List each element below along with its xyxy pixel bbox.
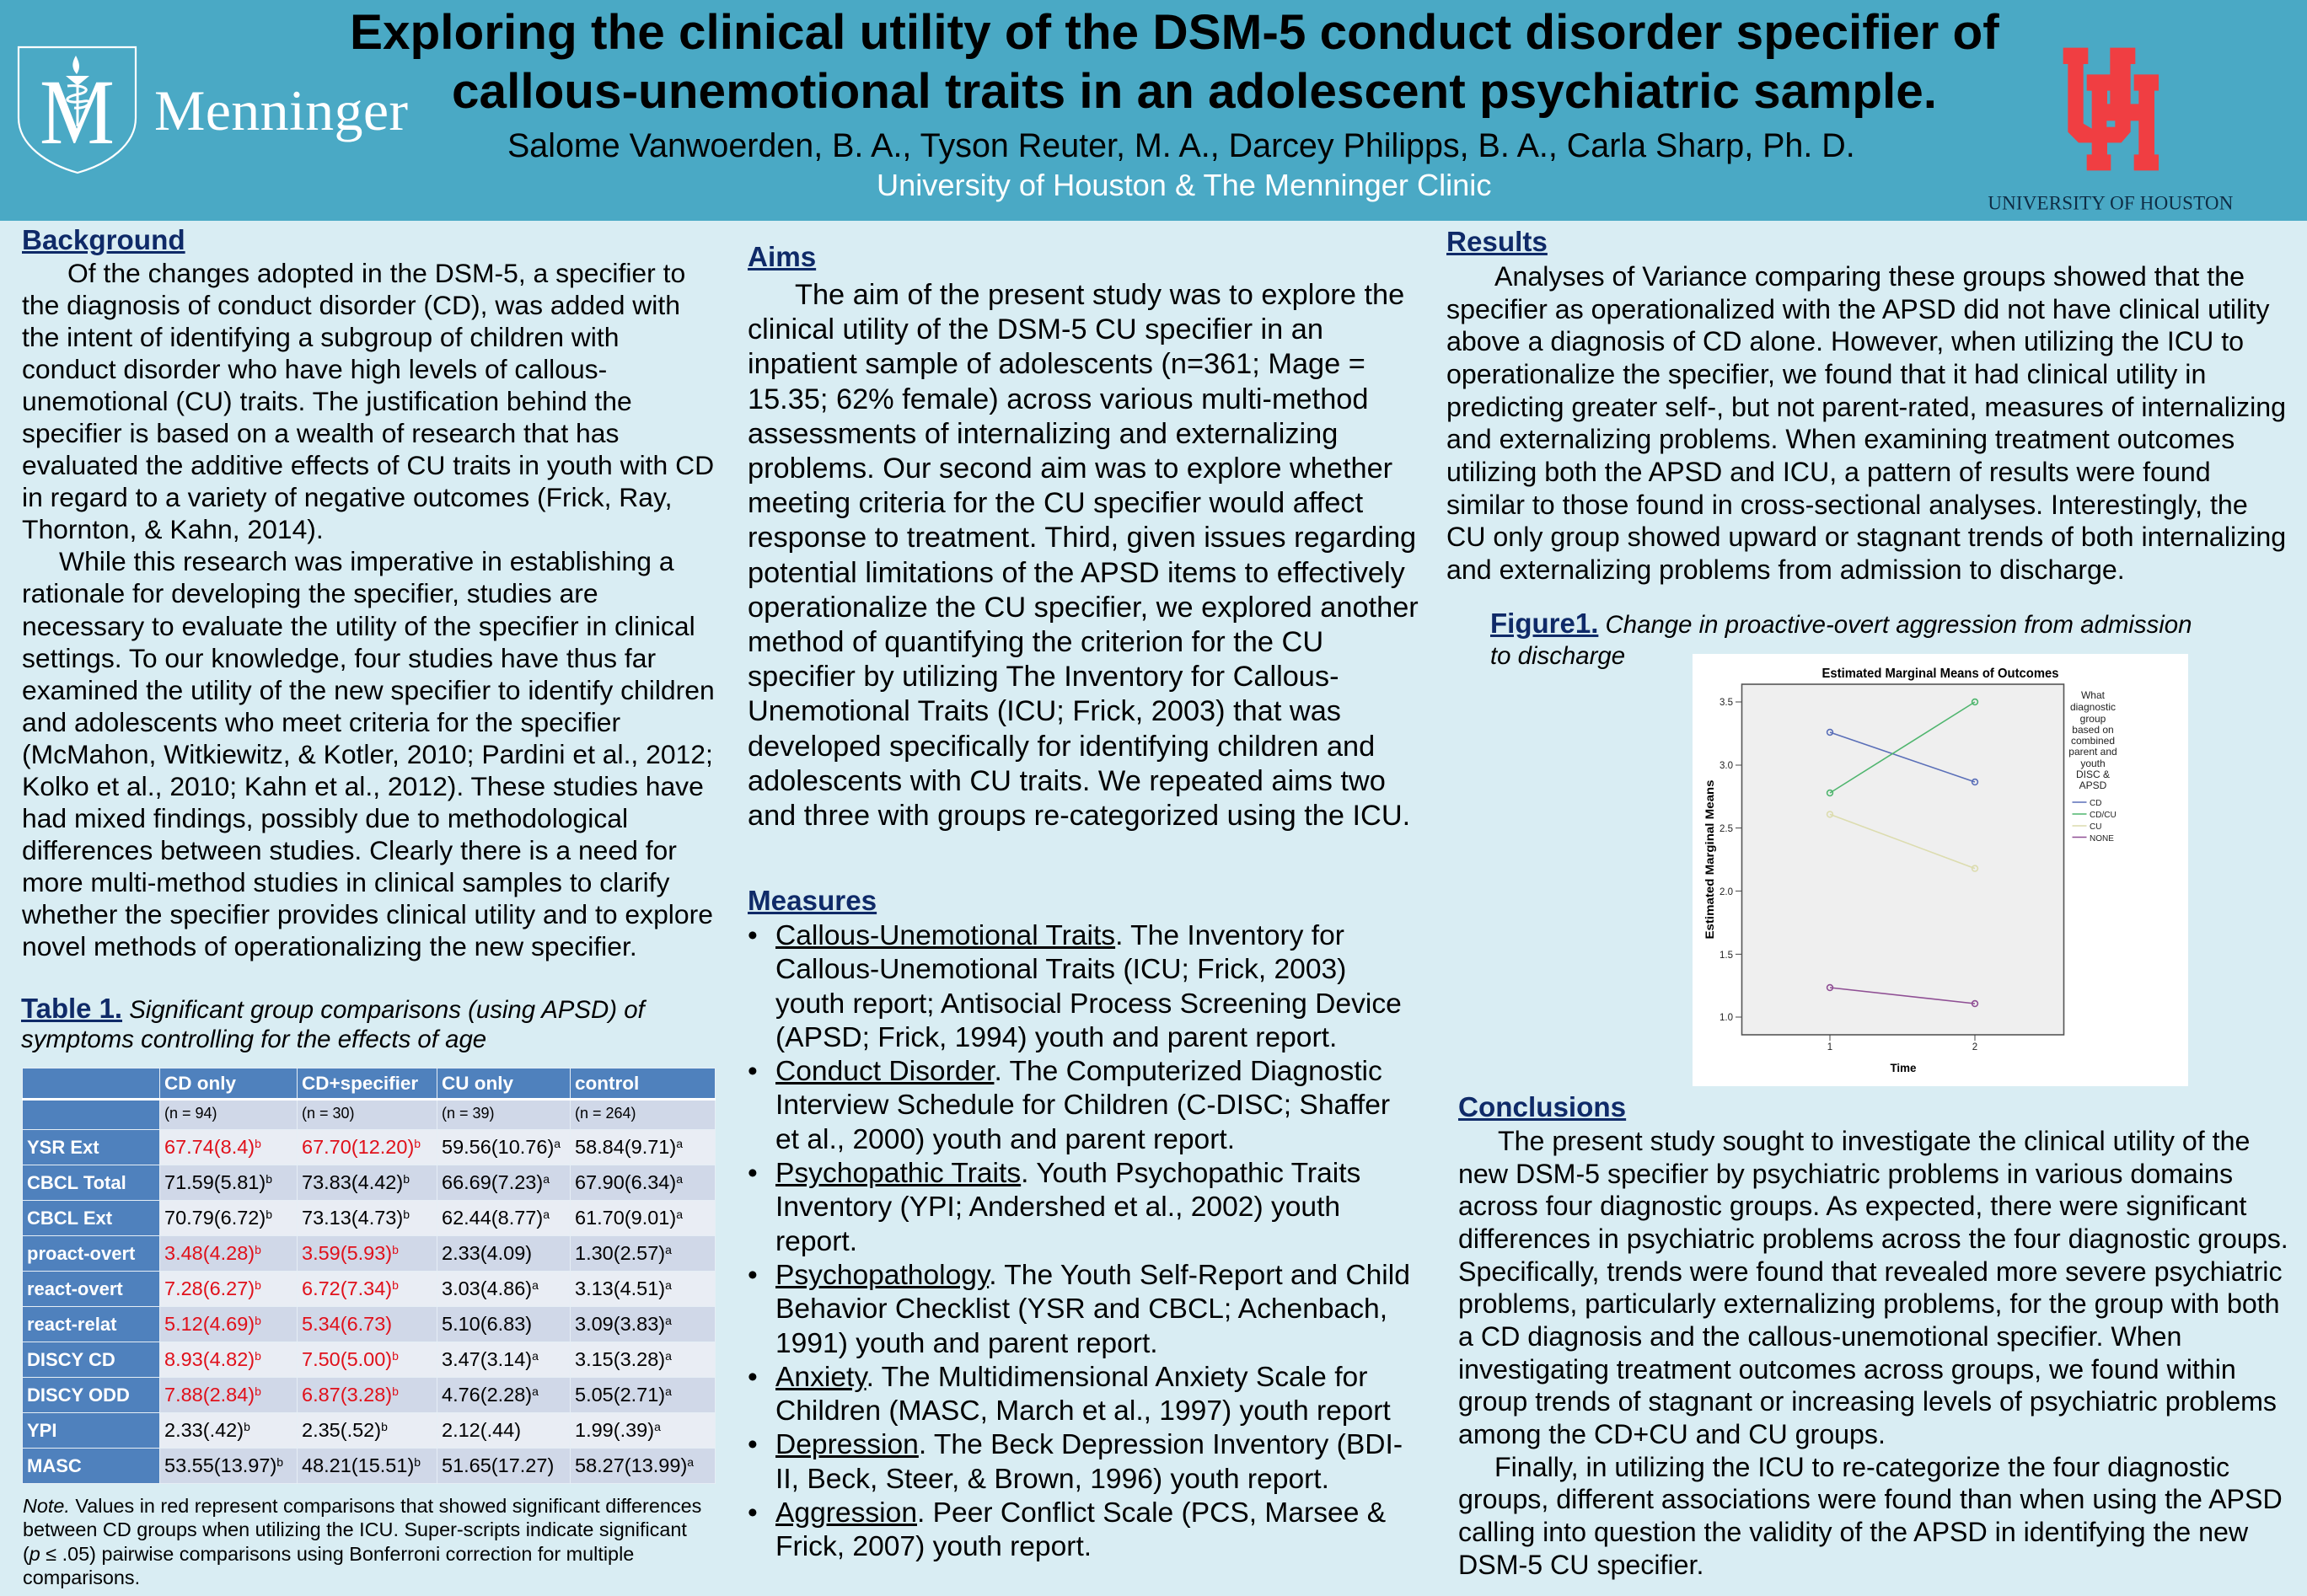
heading: conclusions: Conclusions xyxy=(1458,1092,1626,1122)
text: conclusions body: investigating treatment outcomes across groups, we found within xyxy=(1458,1354,2236,1384)
text: aims body: clinical utility of the DSM-5 CU specifier in an xyxy=(748,313,1323,345)
x axis labels: 2 xyxy=(1972,1042,1977,1052)
table: group comparisons: 67.90(6.34)a xyxy=(575,1171,683,1193)
text: results body: operationalize the specifier, we found that it had clinical utility in xyxy=(1446,359,2206,389)
list: measures: Children (MASC, March et al., 1997) youth report xyxy=(775,1395,1391,1427)
table: group comparisons: 5.34(6.73) xyxy=(302,1313,392,1335)
table: group comparisons: (n = 39) xyxy=(442,1105,495,1122)
table: group comparisons: 71.59(5.81)b xyxy=(164,1171,272,1193)
text: results body: utilizing both the APSD and ICU, a pattern of results were found xyxy=(1446,457,2211,487)
text: conclusions body: among the CD+CU and CU groups. xyxy=(1458,1419,1886,1449)
table: group comparisons: 3.59(5.93)b xyxy=(302,1242,399,1264)
list: measures: Depression. The Beck Depression Inventory (BDI- xyxy=(775,1429,1403,1460)
legend: NONE xyxy=(2090,834,2114,844)
table: group comparisons: control xyxy=(575,1073,639,1094)
table: group comparisons: 4.76(2.28)a xyxy=(442,1384,539,1406)
title: Exploring the clinical utility of the DSM-5 conduct disorder specifier of xyxy=(350,5,1999,60)
table: group comparisons: 5.05(2.71)a xyxy=(575,1384,672,1406)
legend: group xyxy=(2080,713,2106,725)
y axis ticks: 1.5 xyxy=(1720,951,1733,961)
text: background body: While this research was imperative in establishing a xyxy=(59,546,674,576)
text: background body: Thornton, & Kahn, 2014). xyxy=(22,514,324,544)
text: background body: unemotional (CU) traits. The justification behind the xyxy=(22,386,632,416)
table: group comparisons: MASC xyxy=(27,1454,82,1476)
table: group comparisons: 5.10(6.83) xyxy=(442,1313,532,1335)
table: group comparisons xyxy=(22,1068,716,1484)
table: group comparisons: 3.47(3.14)a xyxy=(442,1348,539,1370)
table: group comparisons: CU only xyxy=(442,1073,513,1094)
table: group comparisons: 3.03(4.86)a xyxy=(442,1277,539,1299)
table: group comparisons: 58.84(9.71)a xyxy=(575,1136,683,1158)
table: group comparisons: CD+specifier xyxy=(302,1073,418,1094)
text: conclusions body: problems, particularly externalizing problems, for the group with both xyxy=(1458,1288,2280,1319)
table: group comparisons: 51.65(17.27) xyxy=(442,1454,554,1476)
text: background body: the diagnosis of conduct disorder (CD), was added with xyxy=(22,290,680,320)
text: background body: (McMahon, Witkiewitz, & Kotler, 2010; Pardini et al., 2012; xyxy=(22,739,713,769)
table: group comparisons: (n = 30) xyxy=(302,1105,355,1122)
panel: measures: • xyxy=(748,1158,758,1189)
text: conclusions body: a CD diagnosis and the callous-unemotional specifier. When xyxy=(1458,1321,2181,1352)
text: conclusions body: new DSM-5 specifier by psychiatric problems in various domains xyxy=(1458,1159,2233,1189)
table: group comparisons: YSR Ext xyxy=(27,1136,99,1158)
list: measures: 1991) youth and parent report. xyxy=(775,1328,1158,1359)
text: conclusions body xyxy=(1458,1126,2288,1580)
logo: Menninger: M xyxy=(40,61,115,163)
title xyxy=(350,5,1999,119)
header banner xyxy=(0,0,2307,221)
x axis title: Time xyxy=(1890,1061,1917,1074)
list: measures: Anxiety. The Multidimensional Anxiety Scale for xyxy=(775,1362,1367,1393)
table: group comparisons: 3.09(3.83)a xyxy=(575,1313,672,1335)
list: measures: Callous-Unemotional Traits (ICU; Frick, 2003) xyxy=(775,954,1346,985)
text: background body: specifier is based on a wealth of research that has xyxy=(22,418,619,448)
text: aims body: 15.35; 62% female) across various multi-method xyxy=(748,383,1368,415)
table: group comparisons: 5.12(4.69)b xyxy=(164,1313,261,1335)
figure caption xyxy=(1490,608,2192,670)
list: measures: youth report; Antisocial Process Screening Device xyxy=(775,988,1402,1020)
x axis labels xyxy=(1827,1042,1977,1052)
panel: table 1 xyxy=(21,993,716,1588)
y axis ticks: 2.5 xyxy=(1720,824,1733,834)
text: conclusions body: Specifically, trends were found that revealed more severe psychiatric xyxy=(1458,1256,2283,1287)
text: aims body: assessments of internalizing and externalizing xyxy=(748,418,1338,450)
logo: Menninger xyxy=(17,46,408,174)
panel: aims xyxy=(748,241,1419,832)
text: aims body: inpatient sample of adolescents (n=361; Mage = xyxy=(748,348,1365,380)
text: results body: and externalizing problems from admission to discharge. xyxy=(1446,554,2125,585)
table note: between CD groups when utilizing the ICU. Super-scripts indicate significant xyxy=(23,1518,687,1540)
panel: measures: • xyxy=(748,1497,758,1529)
text: aims body: Unemotional Traits (ICU; Frick, 2003) that was xyxy=(748,695,1341,727)
legend: youth xyxy=(2080,758,2106,769)
legend: diagnostic xyxy=(2070,701,2116,713)
text: background body xyxy=(22,258,715,961)
text: background body: settings. To our knowledge, four studies have thus far xyxy=(22,643,656,673)
table: group comparisons: 67.70(12.20)b xyxy=(302,1136,421,1158)
text: background body: in regard to a variety of negative outcomes (Frick, Ray, xyxy=(22,482,672,512)
text: background body: more multi-method studies in clinical samples to clarify xyxy=(22,867,669,897)
y axis ticks: 3.5 xyxy=(1720,698,1733,708)
series: NONE xyxy=(1827,985,1977,1006)
text: aims body: specifier by utilizing The Inventory for Callous- xyxy=(748,661,1339,693)
text: aims body: The aim of the present study was to explore the xyxy=(795,279,1404,311)
figure caption: Figure1. Change in proactive-overt aggression from admission xyxy=(1490,608,2192,639)
text: background body: the intent of identifying a subgroup of children with xyxy=(22,322,619,352)
line chart: estimated marginal means xyxy=(1693,654,2188,1086)
panel: figure 1 xyxy=(1490,608,2192,1086)
text: conclusions body: The present study sought to investigate the clinical utility of the xyxy=(1498,1126,2250,1156)
text: results body: Analyses of Variance comparing these groups showed that the xyxy=(1494,261,2245,292)
text: aims body: operationalize the CU specifier, we explored another xyxy=(748,592,1419,624)
list: measures: Interview Schedule for Children (C-DISC; Shaffer xyxy=(775,1090,1390,1121)
panel: measures: • xyxy=(748,1260,758,1291)
legend: parent and xyxy=(2068,746,2117,758)
y axis ticks: 3.0 xyxy=(1720,761,1733,771)
legend: combined xyxy=(2071,735,2115,747)
y axis ticks xyxy=(1720,698,1975,1041)
table: group comparisons: 73.83(4.42)b xyxy=(302,1171,410,1193)
table: group comparisons: 7.88(2.84)b xyxy=(164,1384,261,1406)
table: group comparisons: react-overt xyxy=(27,1277,123,1299)
table: group comparisons: DISCY ODD xyxy=(27,1384,130,1406)
table: group comparisons: 1.99(.39)a xyxy=(575,1419,661,1441)
table: group comparisons: CD only xyxy=(164,1073,236,1094)
text: aims body: adolescents with CU traits. We repeated aims two xyxy=(748,765,1386,797)
table: group comparisons: 6.87(3.28)b xyxy=(302,1384,399,1406)
list: measures: Aggression. Peer Conflict Scale (PCS, Marsee & xyxy=(775,1497,1386,1529)
table: group comparisons: 7.50(5.00)b xyxy=(302,1348,399,1370)
panel: background xyxy=(22,224,715,961)
table caption: symptoms controlling for the effects of age xyxy=(21,1026,486,1053)
panel: measures: • xyxy=(748,1362,758,1393)
text: conclusions body: groups, different associations were found than when using the APSD xyxy=(1458,1484,2283,1514)
logo: University of Houston: UNIVERSITY OF HOUSTON xyxy=(1988,192,2234,213)
text: background body: evaluated the additive effects of CU traits in youth with CD xyxy=(22,450,714,480)
legend xyxy=(2068,689,2117,844)
table: group comparisons: 7.28(6.27)b xyxy=(164,1277,261,1299)
table: group comparisons: 1.30(2.57)a xyxy=(575,1242,672,1264)
authors: Salome Vanwoerden, B. A., Tyson Reuter, M. A., Darcey Philipps, B. A., Carla Sharp, Ph. D. xyxy=(507,127,1855,164)
text: conclusions body: DSM-5 CU specifier. xyxy=(1458,1550,1703,1580)
legend: APSD xyxy=(2079,779,2107,791)
table: group comparisons: 67.74(8.4)b xyxy=(164,1136,261,1158)
table: group comparisons: 59.56(10.76)a xyxy=(442,1136,561,1158)
table: group comparisons: 3.13(4.51)a xyxy=(575,1277,672,1299)
text: results body: CU only group showed upward or stagnant trends of both internalizing xyxy=(1446,522,2286,552)
table: group comparisons: 6.72(7.34)b xyxy=(302,1277,399,1299)
list: measures: Psychopathic Traits. Youth Psychopathic Traits xyxy=(775,1158,1360,1189)
table note: (p ≤ .05) pairwise comparisons using Bonferroni correction for multiple xyxy=(23,1543,634,1565)
text: background body: novel methods of operationalizing the new specifier. xyxy=(22,931,637,961)
table: group comparisons: proact-overt xyxy=(27,1242,135,1264)
table: group comparisons: 3.15(3.28)a xyxy=(575,1348,672,1370)
panel: results xyxy=(1446,226,2286,585)
list: measures: et al., 2000) youth and parent report. xyxy=(775,1124,1235,1155)
panel: measures: • xyxy=(748,1056,758,1087)
panel: conclusions xyxy=(1458,1092,2288,1580)
table: group comparisons: CBCL Total xyxy=(27,1171,126,1193)
heading: results: Results xyxy=(1446,226,1548,258)
y axis title: Estimated Marginal Means xyxy=(1703,779,1716,939)
figure caption: to discharge xyxy=(1490,642,1625,670)
text: results body: above a diagnosis of CD alone. However, when utilizing the ICU to xyxy=(1446,326,2244,356)
list: measures: II, Beck, Steer, & Brown, 1996) youth report. xyxy=(775,1464,1329,1495)
title: callous-unemotional traits in an adolescent psychiatric sample. xyxy=(452,64,1937,119)
text: aims body: method of quantifying the criterion for the CU xyxy=(748,626,1323,658)
table caption: Table 1. Significant group comparisons (using APSD) of xyxy=(21,993,645,1024)
text: conclusions body: differences in psychiatric problems across the four diagnostic groups. xyxy=(1458,1224,2288,1254)
text: aims body: developed specifically for identifying children and xyxy=(748,731,1375,763)
list: measures: Psychopathology. The Youth Self-Report and Child xyxy=(775,1260,1410,1291)
legend: CD/CU xyxy=(2090,811,2117,820)
panel: measures: • xyxy=(748,1429,758,1460)
table: group comparisons: 3.48(4.28)b xyxy=(164,1242,261,1264)
table note xyxy=(23,1495,701,1588)
table: group comparisons: 73.13(4.73)b xyxy=(302,1207,410,1229)
table: group comparisons: (n = 94) xyxy=(164,1105,217,1122)
legend: CU xyxy=(2090,822,2101,832)
table: group comparisons: YPI xyxy=(27,1419,56,1441)
table: group comparisons: 66.69(7.23)a xyxy=(442,1171,550,1193)
y axis ticks: 1.0 xyxy=(1720,1013,1733,1023)
logo: Menninger: Menninger xyxy=(154,78,408,142)
list: measures: Frick, 2007) youth report. xyxy=(775,1531,1092,1562)
heading: measures: Measures xyxy=(748,885,877,917)
table: group comparisons: (n = 264) xyxy=(575,1105,636,1122)
legend: based on xyxy=(2072,724,2114,736)
text: results body: and externalizing problems. When examining treatment outcomes xyxy=(1446,424,2235,454)
table: group comparisons: react-relat xyxy=(27,1313,116,1335)
series: CU xyxy=(1827,811,1977,871)
text: conclusions body: group trends of stagnant or increasing levels of psychiatric problems xyxy=(1458,1386,2277,1417)
text: background body: and adolescents who meet criteria for the specifier xyxy=(22,707,620,737)
text: background body: conduct disorder who have high levels of callous- xyxy=(22,354,607,384)
table: group comparisons: 48.21(15.51)b xyxy=(302,1454,421,1476)
affiliation: University of Houston & The Menninger Clinic xyxy=(877,168,1491,202)
x axis labels: 1 xyxy=(1827,1042,1832,1052)
list: measures: Behavior Checklist (YSR and CBCL; Achenbach, xyxy=(775,1293,1387,1325)
text: aims body: problems. Our second aim was to explore whether xyxy=(748,453,1392,485)
text: background body: Of the changes adopted in the DSM-5, a specifier to xyxy=(67,258,685,288)
text: conclusions body: Finally, in utilizing the ICU to re-categorize the four diagnostic xyxy=(1494,1452,2229,1482)
text: results body: predicting greater self-, but not parent-rated, measures of internalizing xyxy=(1446,392,2286,422)
text: background body: differences between studies. Clearly there is a need for xyxy=(22,835,677,865)
table: group comparisons: 61.70(9.01)a xyxy=(575,1207,683,1229)
table: group comparisons: 2.35(.52)b xyxy=(302,1419,388,1441)
legend: DISC & xyxy=(2076,769,2110,780)
text: conclusions body: calling into question the validity of the APSD in identifying the new xyxy=(1458,1517,2248,1547)
table: group comparisons: 53.55(13.97)b xyxy=(164,1454,283,1476)
list: measures: Conduct Disorder. The Computerized Diagnostic xyxy=(775,1056,1382,1087)
line chart: estimated marginal means: Estimated Marginal Means of Outcomes xyxy=(1822,667,2059,681)
text: background body: had mixed findings, possibly due to methodological xyxy=(22,803,628,833)
text: aims body: response to treatment. Third, given issues regarding xyxy=(748,522,1416,554)
list: measures: report. xyxy=(775,1226,857,1257)
panel: measures xyxy=(748,885,1410,1562)
heading: background: Background xyxy=(22,224,185,256)
table: group comparisons: 2.33(4.09) xyxy=(442,1242,532,1264)
table: group comparisons: 70.79(6.72)b xyxy=(164,1207,272,1229)
table: group comparisons: 62.44(8.77)a xyxy=(442,1207,550,1229)
list: measures: Callous-Unemotional Traits. The Inventory for xyxy=(775,920,1344,951)
y axis ticks: 2.0 xyxy=(1720,887,1733,897)
text: background body: examined the utility of the new specifier to identify children xyxy=(22,675,715,705)
text: background body: rationale for developing the specifier, studies are xyxy=(22,578,598,608)
panel: measures: • xyxy=(748,920,758,951)
text: results body: specifier as operationalized with the APSD did not have clinical utility xyxy=(1446,294,2269,324)
table: group comparisons: 8.93(4.82)b xyxy=(164,1348,261,1370)
series: CD xyxy=(1827,730,1977,785)
text: results body xyxy=(1446,261,2286,585)
list: measures xyxy=(748,920,1410,1562)
table: group comparisons: DISCY CD xyxy=(27,1348,115,1370)
text: results body: similar to those found in cross-sectional analyses. Interestingly, the xyxy=(1446,490,2248,520)
text: aims body: meeting criteria for the CU specifier would affect xyxy=(748,487,1363,519)
text: background body: Kolko et al., 2010; Kahn et al., 2012). These studies have xyxy=(22,771,704,801)
series: CD/CU xyxy=(1827,699,1977,795)
table: group comparisons: CBCL Ext xyxy=(27,1207,112,1229)
text: background body: whether the specifier provides clinical utility and to explore xyxy=(22,899,713,929)
table: group comparisons: 2.12(.44) xyxy=(442,1419,521,1441)
legend: CD xyxy=(2090,799,2101,808)
table: group comparisons: 58.27(13.99)a xyxy=(575,1454,694,1476)
list: measures: (APSD; Frick, 1994) youth and parent report. xyxy=(775,1022,1337,1053)
text: aims body: potential limitations of the APSD items to effectively xyxy=(748,557,1405,589)
table: group comparisons: 2.33(.42)b xyxy=(164,1419,250,1441)
logo: University of Houston xyxy=(1988,47,2234,213)
text: aims body xyxy=(748,279,1419,832)
text: background body: necessary to evaluate the utility of the specifier in clinical xyxy=(22,611,695,641)
list: measures: Inventory (YPI; Andershed et al., 2002) youth xyxy=(775,1192,1340,1223)
table note: Note. Values in red represent comparisons that showed significant differences xyxy=(23,1495,701,1517)
text: aims body: and three with groups re-categorized using the ICU. xyxy=(748,800,1410,832)
text: conclusions body: across four diagnostic groups. As expected, there were significant xyxy=(1458,1191,2246,1221)
legend: What xyxy=(2081,689,2106,701)
table caption xyxy=(21,993,647,1053)
heading: aims: Aims xyxy=(748,241,816,273)
table note: comparisons. xyxy=(23,1567,140,1588)
